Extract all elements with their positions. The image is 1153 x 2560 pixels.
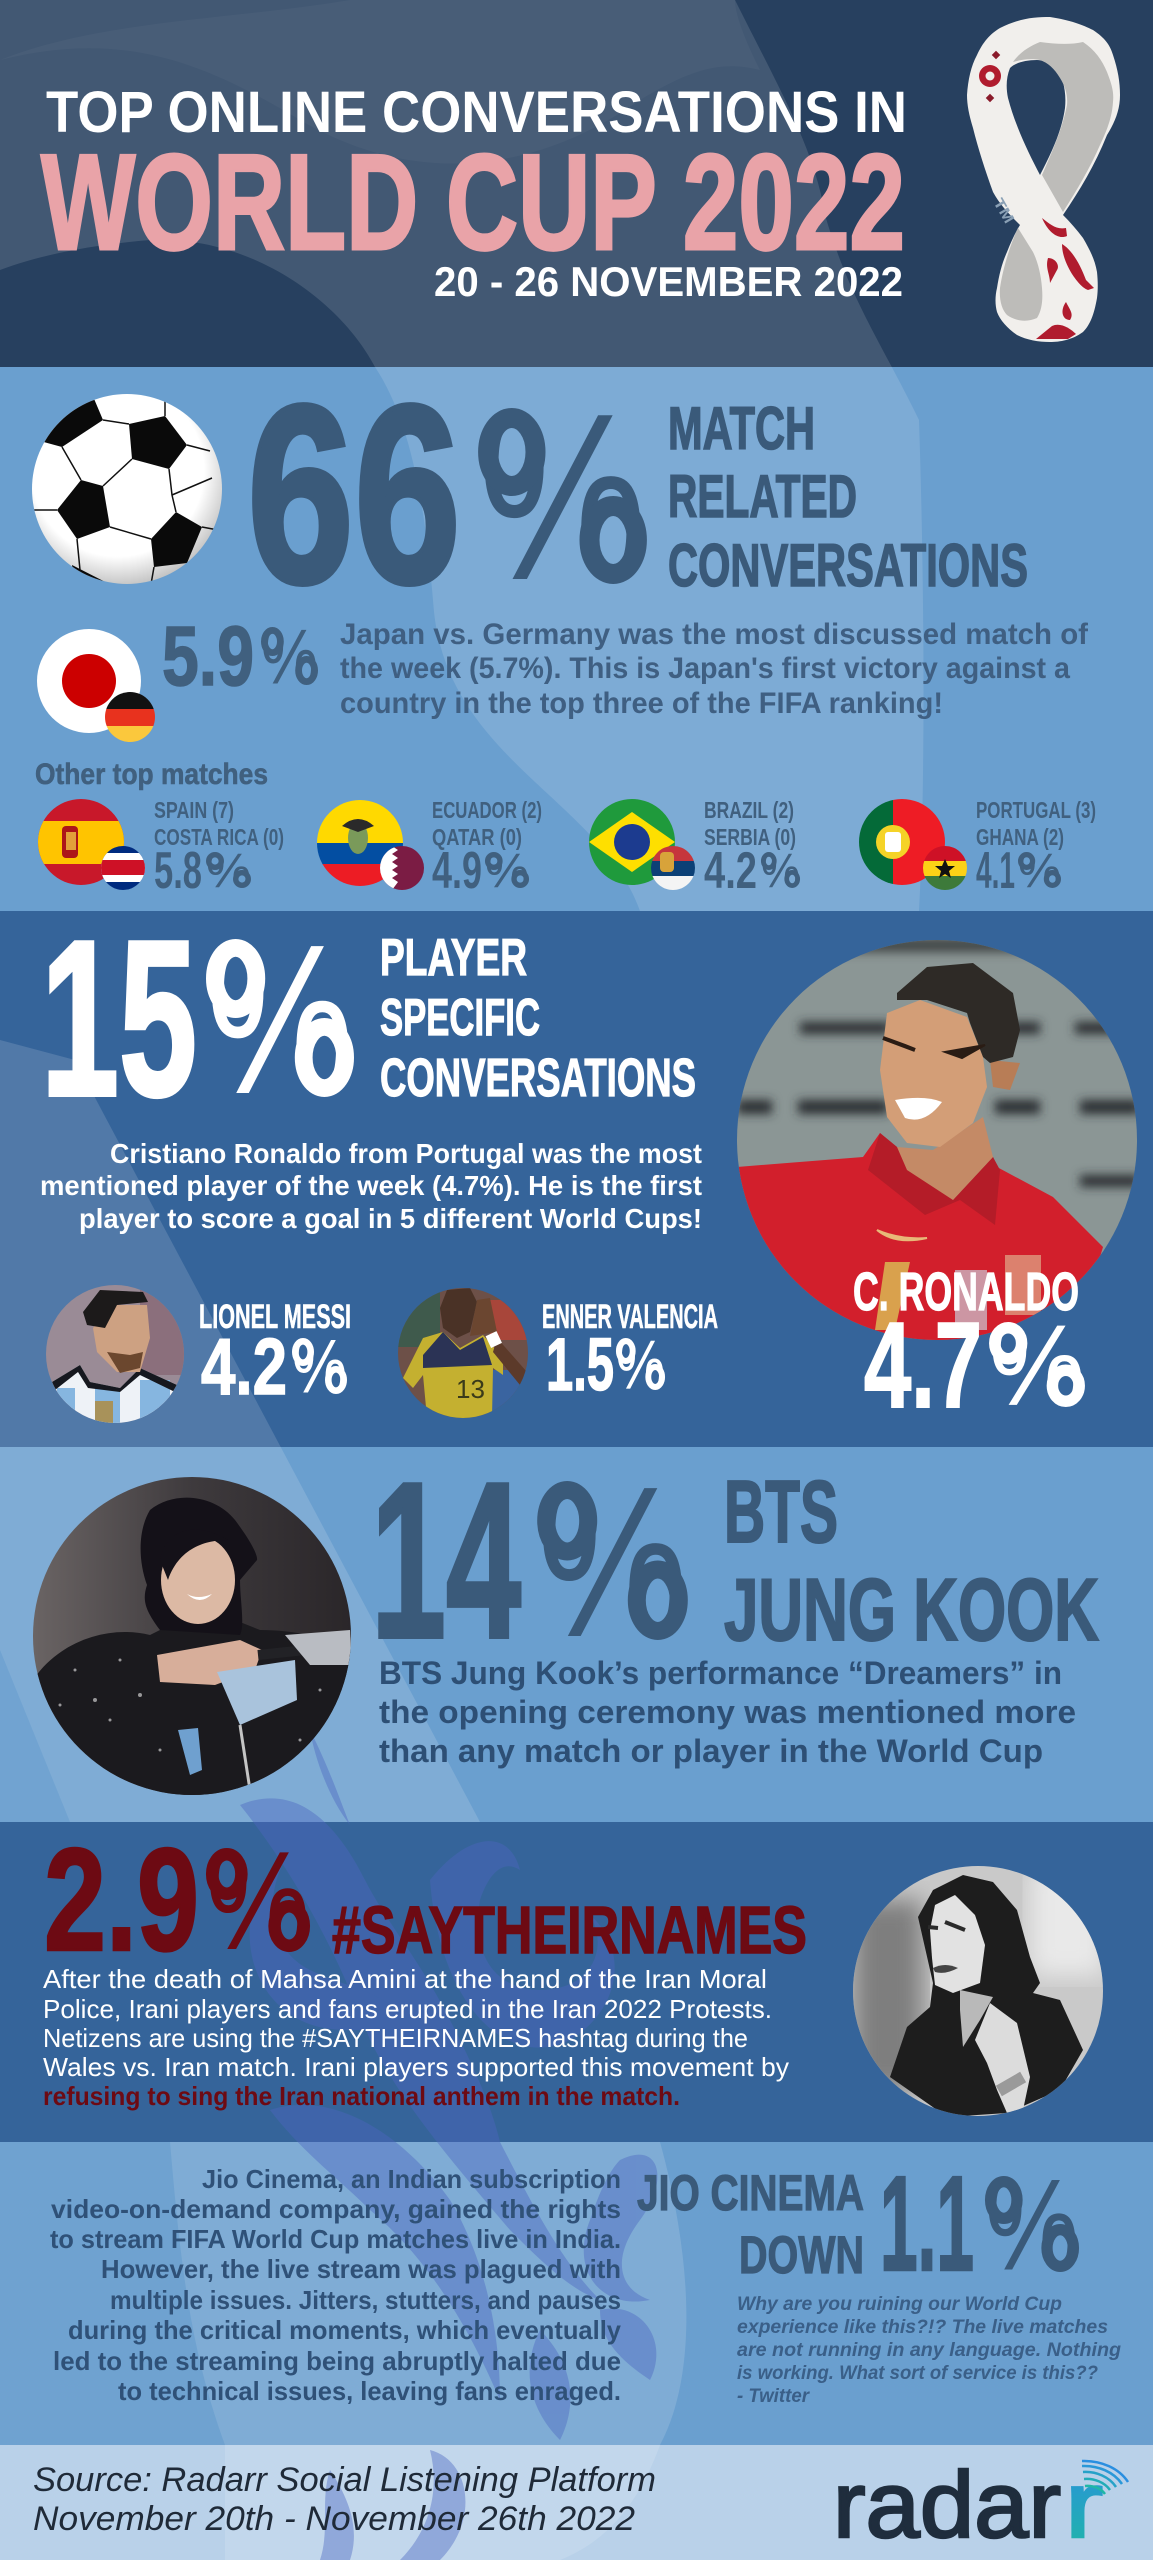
text: iran protest description: refusing to sing the Iran national anthem in the match.: [43, 2081, 680, 2111]
big stat: 2.9 percent: 2.9: [44, 1818, 199, 1981]
match: portugal vs ghana: [859, 799, 1096, 890]
stat: ronaldo 4.7 percent: 4.7: [864, 1297, 982, 1433]
stat: messi 4.2 percent: 4.2: [201, 1322, 287, 1411]
photo: enner valencia: [398, 1287, 530, 1420]
heading: bts jung kook: BTS: [724, 1462, 838, 1561]
text: jio cinema description: Jio Cinema, an Indian subscription: [202, 2164, 621, 2194]
match: ecuador vs qatar: %: [485, 844, 529, 898]
flourish: [240, 1730, 657, 2560]
heading: match related conversations: RELATED: [668, 463, 857, 530]
text: japan vs germany: Japan vs. Germany was the most discussed match of: [340, 618, 1089, 651]
text: twitter quote: - Twitter: [737, 2386, 811, 2407]
heading: match related conversations: [668, 395, 1028, 599]
text: iran protest description: Police, Irani players and fans erupted in the Iran 2022 Protests.: [43, 1994, 772, 2024]
heading: other top matches: Other top matches: [35, 758, 268, 791]
match: ecuador vs qatar: [317, 800, 542, 890]
match: portugal vs ghana: 4.1: [976, 842, 1015, 900]
big stat: 2.9 percent: %: [206, 1822, 310, 1979]
text: twitter quote: [737, 2294, 1121, 2407]
icon: japan and germany flags: [37, 629, 155, 743]
text: iran protest description: Netizens are using the #SAYTHEIRNAMES hashtag during the: [43, 2023, 748, 2053]
text: twitter quote: experience like this?!? The live matches: [737, 2317, 1108, 2338]
panel: bts jung kook: [33, 1477, 1100, 1795]
heading: match related conversations: MATCH: [668, 395, 815, 462]
match: ecuador vs qatar: QATAR (0): [432, 824, 522, 850]
big stat: 66 percent: %: [478, 365, 647, 630]
logo: radarr: radar: [833, 2452, 1061, 2557]
stat: 5.9 percent: 5.9: [162, 609, 254, 703]
text: jung kook description: the opening ceremony was mentioned more: [379, 1694, 1076, 1730]
text: jio cinema description: video-on-demand company, gained the rights: [51, 2194, 621, 2224]
heading: hashtag: #SAYTHEIRNAMES: [332, 1893, 807, 1968]
text: ronaldo description: Cristiano Ronaldo from Portugal was the most: [110, 1138, 702, 1169]
match: brazil vs serbia: SERBIA (0): [704, 824, 796, 850]
heading: player specific conversations: CONVERSATIONS: [380, 1048, 696, 1108]
match: brazil vs serbia: BRAZIL (2): [704, 797, 794, 823]
big stat: 14 percent: 14: [371, 1437, 521, 1685]
text: iran protest description: [43, 1964, 789, 2111]
panel: match related conversations: [32, 394, 1096, 890]
stat: jio cinema 1.1 percent: 1.1: [880, 2148, 974, 2299]
text: japan vs germany: [340, 618, 1089, 720]
big stat: 15 percent: %: [206, 901, 354, 1139]
heading: player specific conversations: [380, 929, 696, 1108]
big stat: 15 percent: 15: [41, 895, 197, 1143]
text: jio cinema description: to technical issues, leaving fans enraged.: [118, 2376, 621, 2406]
photo: enner valencia: 13: [456, 1374, 485, 1404]
photo: mahsa amini: [853, 1866, 1105, 2117]
label: lionel messi: LIONEL MESSI: [199, 1298, 351, 1336]
heading: jio cinema down: DOWN: [739, 2226, 864, 2285]
photo: cristiano ronaldo: [737, 938, 1140, 1350]
text: jio cinema description: to stream FIFA World Cup matches live in India.: [50, 2224, 621, 2254]
panel: header: [0, 0, 1153, 367]
text: jung kook description: BTS Jung Kook’s performance “Dreamers” in: [379, 1655, 1062, 1691]
photo: jung kook: [33, 1477, 360, 1800]
icon: football: [32, 394, 222, 600]
match: brazil vs serbia: [589, 799, 800, 890]
icon: world cup emblem: TM: [990, 196, 1017, 227]
big stat: 14 percent: %: [537, 1441, 688, 1682]
stat: ronaldo 4.7 percent: %: [989, 1302, 1085, 1430]
big stat: 66 percent: 66: [247, 352, 461, 636]
text: twitter quote: are not running in any language. Nothing: [737, 2340, 1121, 2361]
stat: messi 4.2 percent: %: [292, 1324, 347, 1410]
heading: jio cinema down: JIO CINEMA: [637, 2165, 864, 2221]
match: portugal vs ghana: %: [1018, 844, 1061, 898]
text: jio cinema description: multiple issues. Jitters, stutters, and pauses: [110, 2285, 621, 2315]
title line 1: TOP ONLINE CONVERSATIONS IN: [46, 80, 907, 145]
text: iran protest description: After the death of Mahsa Amini at the hand of the Iran Moral: [43, 1964, 767, 1994]
panel: jio cinema down: [0, 2142, 1153, 2445]
text: source: Source: Radarr Social Listening Platform: [33, 2461, 656, 2499]
text: twitter quote: is working. What sort of service is this??: [737, 2363, 1098, 2384]
photo: lionel messi: [46, 1284, 185, 1428]
text: jio cinema description: led to the streaming being abruptly halted due: [53, 2346, 621, 2376]
panel: footer: [0, 2445, 1153, 2560]
text: twitter quote: Why are you ruining our World Cup: [737, 2294, 1062, 2315]
swooshes: [0, 0, 924, 911]
text: jio cinema description: However, the live stream was plagued with: [101, 2254, 621, 2284]
heading: player specific conversations: SPECIFIC: [380, 989, 540, 1047]
match: spain vs costa rica: COSTA RICA (0): [154, 824, 284, 850]
match: brazil vs serbia: 4.2: [704, 842, 757, 900]
match: portugal vs ghana: PORTUGAL (3): [976, 797, 1096, 823]
match: spain vs costa rica: [38, 799, 284, 890]
stat: valencia 1.5 percent: %: [616, 1326, 665, 1404]
match: ecuador vs qatar: 4.9: [432, 842, 482, 900]
heading: bts jung kook: [724, 1462, 1099, 1659]
text: source: [33, 2461, 656, 2538]
icon: world cup emblem: [967, 17, 1120, 342]
text: japan vs germany: country in the top three of the FIFA ranking!: [340, 687, 943, 720]
stat: 5.9 percent: %: [261, 612, 318, 700]
match: spain vs costa rica: SPAIN (7): [154, 797, 234, 823]
match: spain vs costa rica: %: [206, 844, 251, 898]
logo: radarr: r: [1065, 2452, 1103, 2557]
text: ronaldo description: [40, 1138, 702, 1234]
text: ronaldo description: mentioned player of the week (4.7%). He is the first: [40, 1170, 702, 1201]
text: jung kook description: [379, 1655, 1076, 1769]
text: ronaldo description: player to score a goal in 5 different World Cups!: [79, 1203, 702, 1234]
match: spain vs costa rica: 5.8: [154, 842, 202, 900]
heading: player specific conversations: PLAYER: [380, 929, 527, 987]
label: enner valencia: ENNER VALENCIA: [542, 1298, 718, 1336]
match: brazil vs serbia: %: [761, 844, 800, 898]
date: 20 - 26 NOVEMBER 2022: [434, 258, 903, 305]
match: portugal vs ghana: GHANA (2): [976, 824, 1064, 850]
text: iran protest description: Wales vs. Iran match. Irani players supported this movement by: [43, 2052, 789, 2082]
stat: valencia 1.5 percent: 1.5: [546, 1323, 614, 1406]
text: japan vs germany: the week (5.7%). This is Japan's first victory against a: [340, 652, 1070, 685]
heading: jio cinema down: [637, 2165, 864, 2285]
stat: jio cinema 1.1 percent: %: [985, 2152, 1079, 2298]
text: source: November 20th - November 26th 2022: [33, 2500, 635, 2538]
text: jung kook description: than any match or player in the World Cup: [379, 1733, 1043, 1769]
panel: player specific conversations: [42, 938, 1137, 1423]
text: jio cinema description: [50, 2164, 622, 2406]
match: ecuador vs qatar: ECUADOR (2): [432, 797, 542, 823]
text: jio cinema description: during the critical moments, which eventually: [68, 2315, 622, 2345]
panel: say their names: [43, 1846, 1103, 2116]
